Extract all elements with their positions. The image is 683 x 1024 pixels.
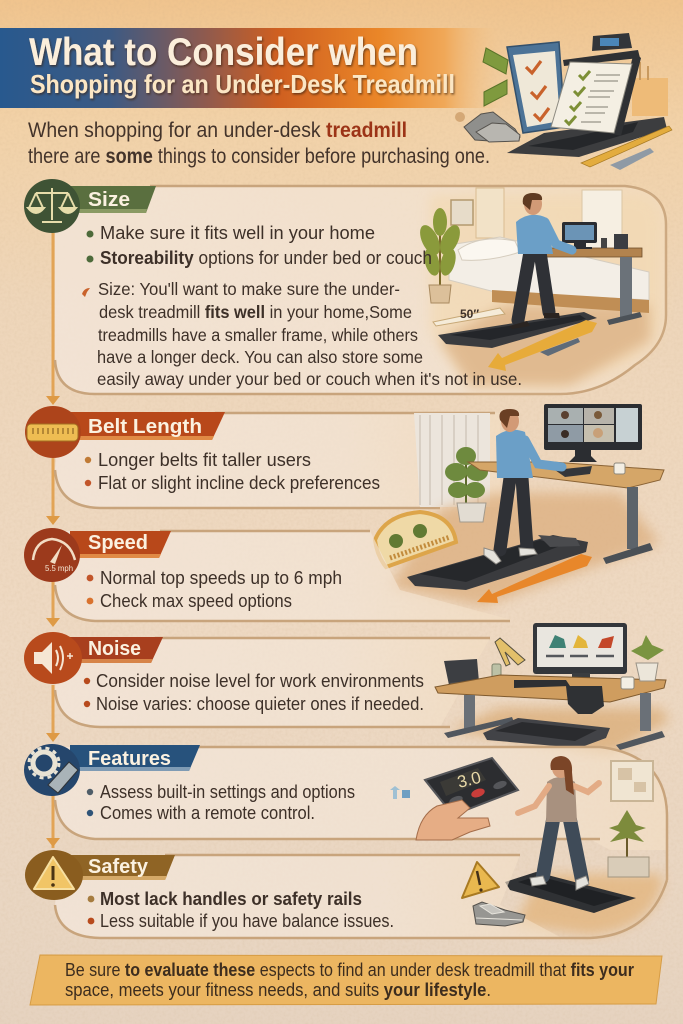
monitor (544, 404, 642, 462)
intro text: there are some things to consider before purchasing one. (28, 145, 490, 168)
hand (416, 800, 490, 840)
intro text (28, 119, 490, 168)
badge: speed (24, 528, 171, 582)
illustration: remote control in hand: 3.0 (455, 768, 483, 792)
treadmill (407, 535, 588, 590)
footer callout: Be sure to evaluate these espects to find an under desk treadmill that fits your (65, 960, 634, 980)
illustration: video call desk and treadmill (375, 404, 664, 606)
dimension label: 50″ (460, 307, 479, 321)
size paragraph: treadmills have a smaller frame, while others (98, 325, 418, 345)
belt length bullets (85, 449, 380, 493)
safety bullets (88, 888, 394, 931)
footer callout (30, 955, 662, 1005)
icon: speedometer: 5.5 mph (45, 564, 73, 573)
icon: gear and keypad (24, 744, 80, 796)
badge: belt length (25, 406, 225, 458)
yellow size arrow (488, 320, 597, 371)
ribbon: speed (70, 531, 171, 558)
icon: balance scales (24, 179, 80, 233)
header illustration: treadmill, checklists, shoes, money, ruler (455, 33, 672, 170)
icon: sneakers (473, 902, 525, 926)
panel: belt length (55, 404, 664, 606)
monitor (533, 623, 627, 681)
intro text: When shopping for an under-desk treadmill (28, 119, 407, 142)
belt length bullets: Flat or slight incline deck preferences (98, 472, 380, 493)
title: What to Consider when (29, 31, 418, 74)
icon: checklist (551, 62, 632, 133)
dimension label (433, 307, 505, 326)
plant (631, 635, 664, 681)
plant (445, 447, 488, 522)
speed bullets: Normal top speeds up to 6 mph (100, 567, 342, 588)
icon: speaker (24, 632, 82, 684)
belt length bullets: Longer belts fit taller users (98, 449, 311, 470)
desk (435, 675, 666, 750)
noise bullets: Consider noise level for work environments (96, 670, 424, 691)
panel: size (55, 186, 666, 394)
timeline connector arrows (46, 233, 60, 848)
icon: money (483, 48, 508, 106)
icon: shoes (455, 112, 520, 142)
icon: tablet checklist (507, 42, 565, 133)
ribbon: belt length: Belt Length (88, 416, 202, 438)
size bullets: Make sure it fits well in your home (100, 222, 375, 243)
features bullets: Comes with a remote control. (100, 802, 315, 823)
panel: features (55, 747, 667, 935)
noise bullets: Noise varies: choose quieter ones if needed. (96, 693, 424, 714)
ribbon: safety (70, 855, 175, 880)
ribbon: speed: Speed (88, 532, 148, 554)
illustration: woman walking with frame and plant (505, 756, 662, 935)
badge: size (24, 179, 156, 233)
features bullets: Assess built-in settings and options (100, 781, 355, 802)
ribbon: safety: Safety (88, 856, 149, 878)
safety bullets: Most lack handles or safety rails (100, 888, 362, 909)
lamp (495, 638, 525, 666)
badge: safety (25, 850, 175, 900)
ribbon: belt length (70, 412, 225, 440)
size paragraph: Size: You'll want to make sure the under- (98, 279, 400, 299)
treadmill (438, 312, 597, 348)
icon: tape ruler (25, 406, 81, 458)
treadmill (483, 718, 610, 748)
size bullets (86, 222, 432, 268)
small floating icons (390, 786, 410, 799)
title banner (0, 28, 505, 108)
plant (608, 810, 649, 877)
ribbon: size: Size (88, 189, 130, 211)
panel: speed (55, 531, 512, 621)
noise bullets (84, 670, 424, 714)
icon: speedometer (24, 528, 80, 582)
panel: safety (55, 855, 667, 938)
size paragraph: desk treadmill fits well in your home,Some (99, 302, 412, 322)
badge: features (24, 744, 200, 796)
badge: noise (24, 632, 163, 684)
icon: warning sign (462, 862, 499, 898)
speed bullets (87, 567, 342, 611)
man (509, 193, 572, 329)
title (29, 31, 455, 99)
laptop (444, 659, 501, 688)
orange length arrow (477, 554, 592, 603)
ribbon: noise: Noise (88, 638, 141, 660)
features bullets (87, 781, 355, 823)
size paragraph: easily away under your bed or couch when it's not in use. (97, 369, 522, 389)
subtitle: Shopping for an Under-Desk Treadmill (30, 69, 455, 99)
icon: treadmill console (563, 33, 641, 136)
illustration: remote control in hand (390, 758, 518, 840)
illustration: bedroom with man on treadmill (416, 188, 660, 388)
ribbon: features (70, 745, 200, 771)
footer callout: space, meets your fitness needs, and suits your lifestyle. (65, 980, 491, 1000)
gold gauge badge (375, 512, 456, 567)
illustration: desk with monitor and treadmill stored under (435, 623, 670, 755)
ribbon: features: Features (88, 748, 171, 770)
bed (449, 237, 649, 313)
man (484, 409, 562, 564)
size paragraph (82, 279, 522, 389)
desk (542, 222, 642, 325)
desk (468, 462, 664, 564)
icon: warning triangle (25, 850, 83, 900)
speed bullets: Check max speed options (100, 590, 292, 611)
size paragraph: have a longer deck. You can also store some (97, 347, 423, 367)
plant (416, 208, 464, 303)
size bullets: Storeability options for under bed or couch (100, 247, 432, 268)
woman (518, 756, 599, 890)
safety bullets: Less suitable if you have balance issues. (100, 910, 394, 931)
panel: noise (55, 623, 670, 755)
